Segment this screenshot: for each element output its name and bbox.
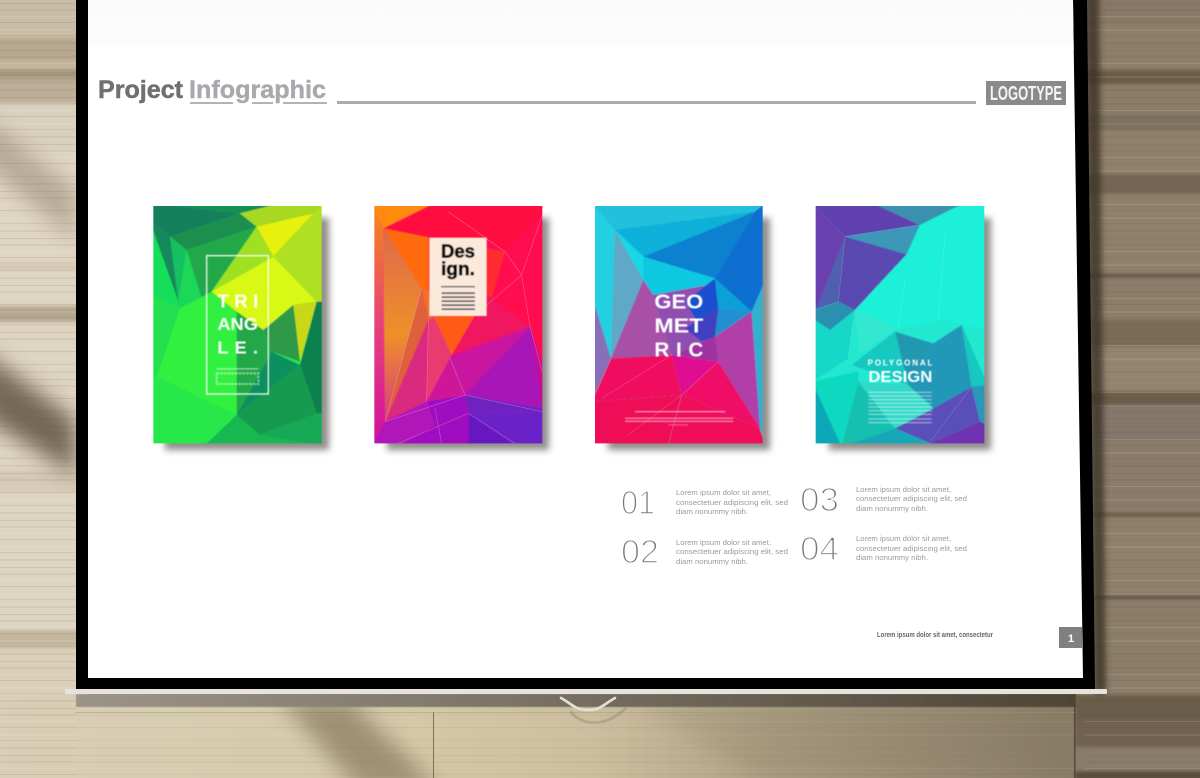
page number (1059, 627, 1082, 648)
item 03: consectetuer adipiscing elit, sed (856, 494, 967, 503)
poster: Geometric: GEO (654, 290, 703, 313)
item 04: Lorem ipsum dolor sit amet, (856, 534, 951, 543)
design label card: ign. (441, 258, 475, 279)
poster: Triangle: LE. (217, 338, 258, 358)
item 01: 01 (621, 484, 655, 521)
item 02: 02 (621, 533, 659, 570)
item 03 (800, 481, 967, 518)
item 01 (621, 484, 788, 521)
design label card (429, 238, 487, 316)
poster: Geometric: RIC (654, 339, 703, 362)
item 01: Lorem ipsum dolor sit amet, (676, 488, 771, 497)
footer note: Lorem ipsum dolor sit amet, consectetur (877, 630, 993, 639)
logotype: LOGOTYPE (990, 83, 1062, 105)
page number: 1 (1068, 633, 1074, 645)
title: Infographic (189, 76, 326, 104)
item 01: consectetuer adipiscing elit, sed (676, 498, 788, 507)
pull handle (561, 698, 626, 723)
poster: Design (371, 203, 549, 450)
item 02 (621, 533, 788, 570)
item 03: Lorem ipsum dolor sit amet, (856, 485, 951, 494)
item 01: diam nonummy nibh. (676, 507, 748, 516)
poster: Triangle: TRI (217, 291, 258, 312)
poster: Geometric: MET (654, 314, 704, 337)
poster: Polygonal Design: DESIGN (868, 369, 932, 386)
item 02: diam nonummy nibh. (676, 557, 748, 566)
item 02: consectetuer adipiscing elit, sed (676, 547, 788, 556)
logotype (986, 81, 1066, 105)
item 03: diam nonummy nibh. (856, 504, 928, 513)
poster: Triangle (150, 203, 329, 450)
item 03: 03 (800, 481, 839, 518)
item 04: consectetuer adipiscing elit, sed (856, 544, 967, 553)
projection screen frame (76, 0, 1095, 689)
design label card: Des (441, 240, 475, 261)
poster: Triangle: ANG (217, 314, 258, 334)
title (98, 76, 327, 104)
poster: Polygonal Design (812, 203, 991, 450)
poster: Polygonal Design: POLYGONAL (868, 358, 932, 367)
header rule (337, 101, 976, 104)
item 04: 04 (800, 530, 839, 567)
item 04 (800, 530, 967, 567)
item 04: diam nonummy nibh. (856, 553, 928, 562)
poster: Geometric (592, 203, 770, 450)
title: Project (98, 76, 184, 104)
screen bottom bar (65, 689, 1107, 694)
item 02: Lorem ipsum dolor sit amet, (676, 538, 771, 547)
screen shadow on wood (76, 0, 1106, 707)
